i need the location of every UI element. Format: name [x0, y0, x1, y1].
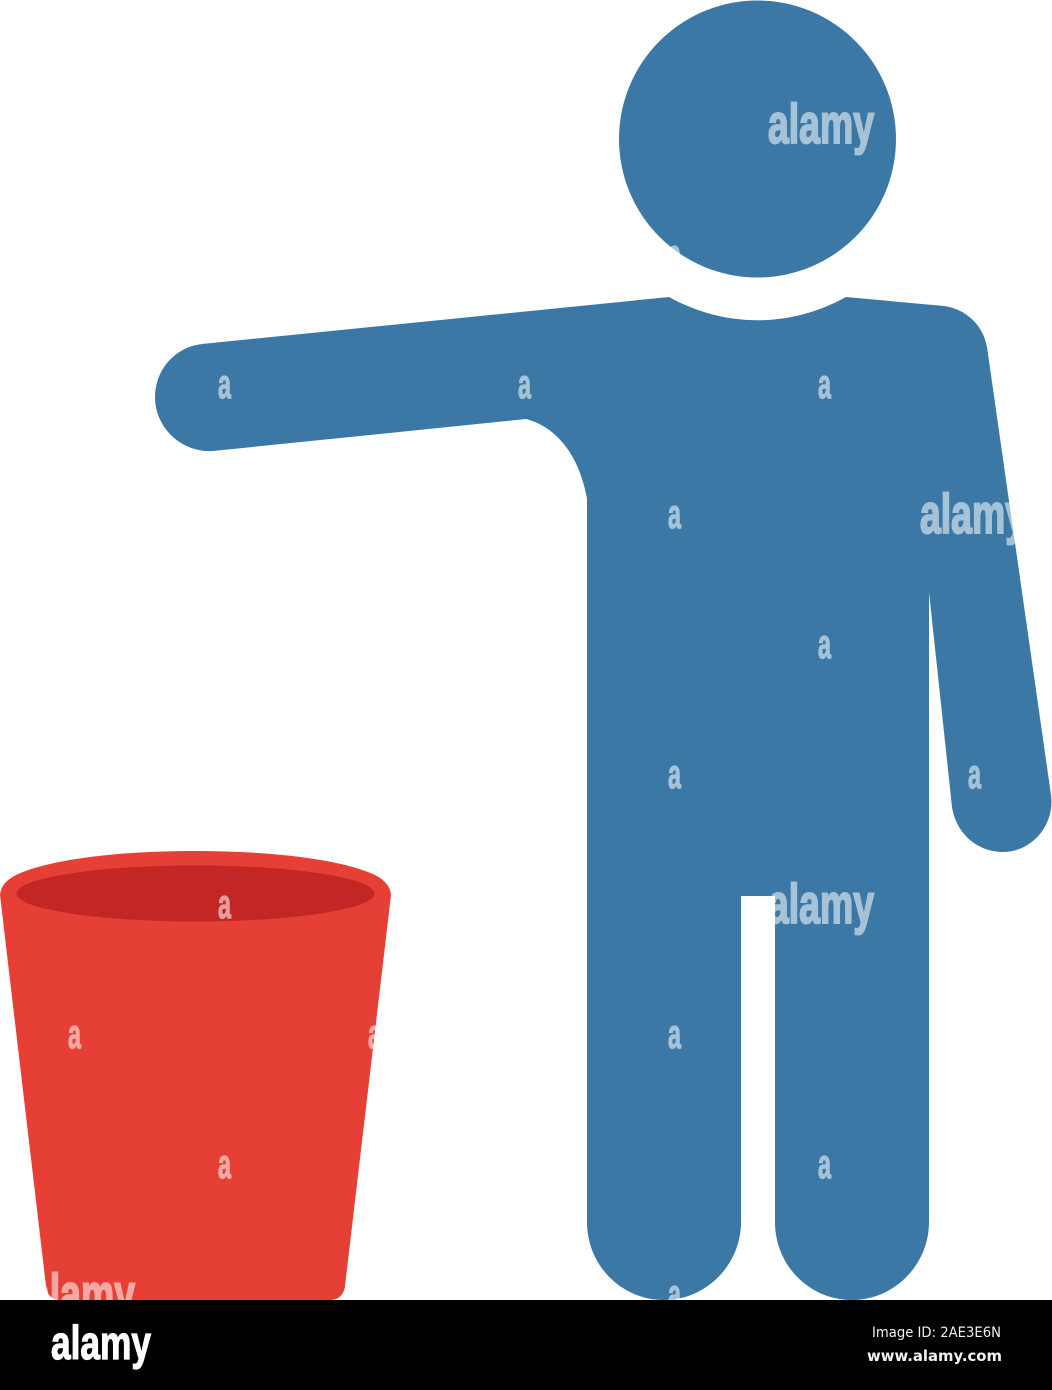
- watermarks: small letter a: a: [968, 751, 982, 797]
- watermarks: small letter a: a: [668, 231, 682, 277]
- watermarks: small letter a: a: [668, 751, 682, 797]
- watermarks: alamy: alamy: [29, 1262, 135, 1325]
- watermarks: alamy: alamy: [768, 92, 874, 155]
- website url: www.alamy.com: [867, 1347, 1002, 1365]
- watermarks: small letter a: a: [218, 881, 232, 927]
- watermarks: alamy: alamy: [768, 872, 874, 935]
- icon: red trash bin: [0, 851, 391, 1300]
- watermarks: small letter a: a: [668, 491, 682, 537]
- icon: person pointing: [155, 0, 1051, 1300]
- watermarks: small letter a: a: [818, 361, 832, 407]
- watermarks: small letter a: a: [368, 1011, 382, 1057]
- footer bar: [0, 1300, 1052, 1390]
- watermarks: small letter a: [68, 231, 982, 1317]
- image id: Image ID: 2AE3E6N: [872, 1325, 1001, 1341]
- watermarks: small letter a: a: [818, 1141, 832, 1187]
- footer logo: alamy: alamy: [51, 1316, 151, 1369]
- watermarks: small letter a: a: [818, 621, 832, 667]
- watermarks: small letter a: a: [668, 1271, 682, 1317]
- watermarks: small letter a: a: [68, 1011, 82, 1057]
- watermarks: small letter a: a: [218, 1141, 232, 1187]
- watermarks: small letter a: a: [668, 1011, 682, 1057]
- watermarks: small letter a: a: [518, 361, 532, 407]
- watermarks: small letter a: a: [218, 361, 232, 407]
